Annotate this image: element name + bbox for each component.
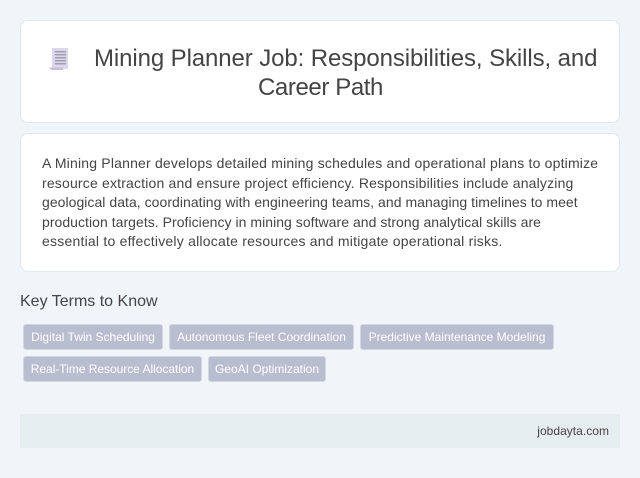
tag: autonomous fleet coordination: Autonomous Fleet Coordination <box>177 330 346 344</box>
title: Career Path <box>258 74 383 101</box>
tag: real-time resource allocation: Real-Time Resource Allocation <box>31 362 194 376</box>
tag: predictive maintenance modeling <box>360 324 554 350</box>
text block: description: geological data, coordinating with engineering teams, and managing timelines to meet <box>42 194 578 210</box>
tag: predictive maintenance modeling: Predictive Maintenance Modeling <box>369 330 545 344</box>
text block: description: A Mining Planner develops detailed mining schedules and operational plans to optimize <box>42 155 598 171</box>
tag: geoai optimization <box>208 356 326 382</box>
footer bar <box>20 414 620 448</box>
title <box>94 45 597 101</box>
tag: geoai optimization: GeoAI Optimization <box>215 362 319 376</box>
icon: document scroll <box>49 48 68 70</box>
footer text: source: jobdayta.com <box>537 424 609 438</box>
text block: description: resource extraction and ensure project efficiency. Responsibilities include analyzing <box>42 174 574 190</box>
text block: description <box>42 155 598 249</box>
title: Mining Planner Job: Responsibilities, Skills, and <box>94 45 597 72</box>
text block: description: production targets. Proficiency in mining software and strong analytical skills are <box>42 214 541 230</box>
panel: description card <box>20 133 620 272</box>
tag: digital twin scheduling <box>23 324 163 350</box>
tag: real-time resource allocation <box>23 356 202 382</box>
panel: key term tags <box>23 324 554 382</box>
heading: key terms: Key Terms to Know <box>20 293 158 310</box>
text block: description: essential to effectively allocate resources and mitigate operational risks. <box>42 233 503 249</box>
tag: digital twin scheduling: Digital Twin Scheduling <box>31 330 155 344</box>
tag: autonomous fleet coordination <box>169 324 354 350</box>
panel: header card <box>20 20 620 123</box>
